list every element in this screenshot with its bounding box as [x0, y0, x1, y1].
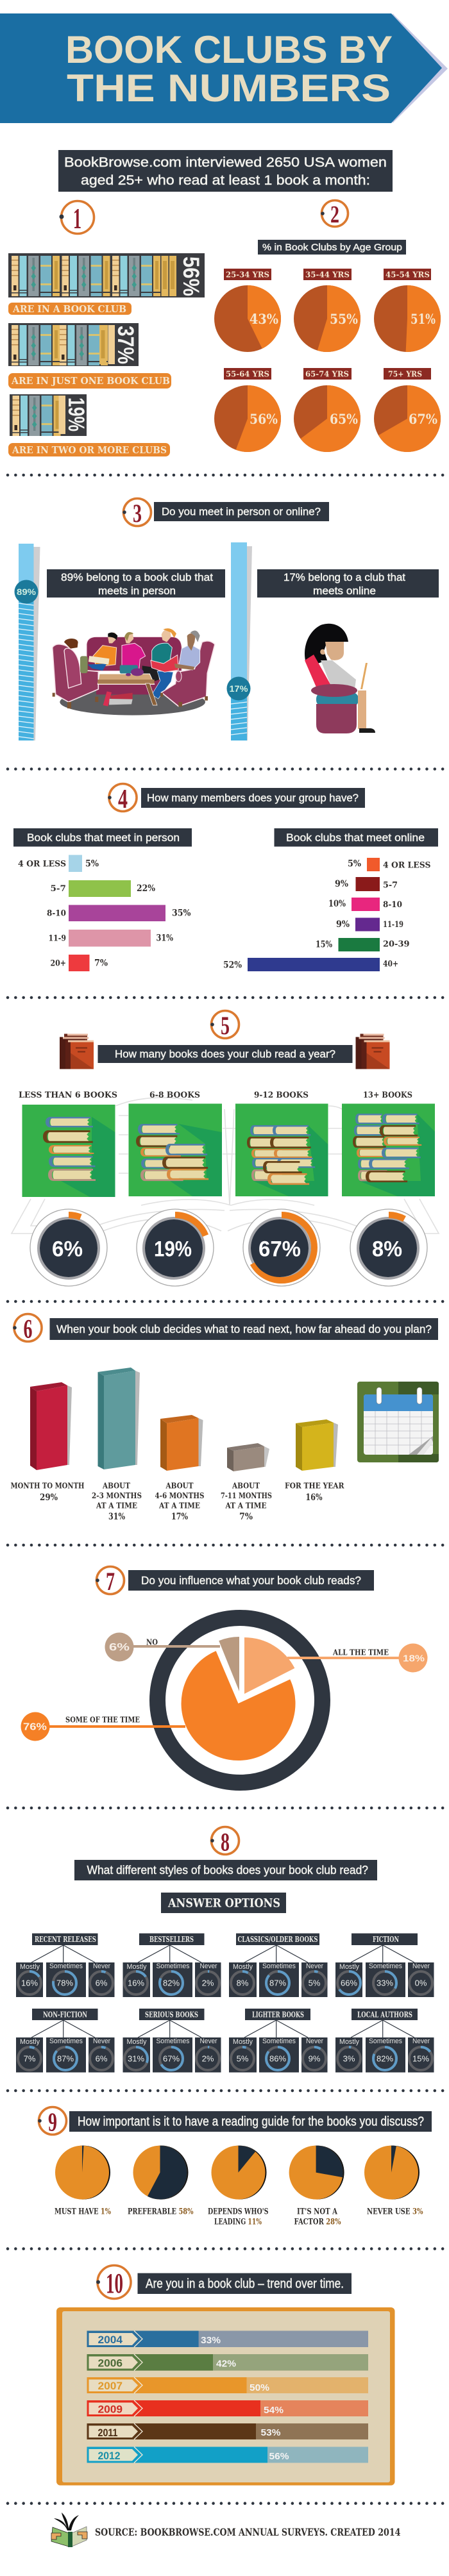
left armchair [53, 644, 98, 708]
bar: for the year [285, 1419, 344, 1503]
intro text box [58, 150, 393, 192]
number badge 9 [38, 2107, 67, 2136]
number badge 2 [321, 200, 348, 228]
footer logo: reader with open book [51, 2513, 87, 2547]
callout: 89 percent in person: meets in person [98, 585, 176, 597]
bar row: 5-7 [335, 877, 398, 891]
bar: 7-11 months: 7% [239, 1512, 253, 1522]
section 10 header [96, 2266, 352, 2299]
gauge: 17 percent online: 17% [230, 684, 248, 694]
section 4 header [108, 783, 365, 814]
callout: 89 percent in person [47, 569, 225, 598]
pie: 65-74 [294, 368, 360, 452]
intro text box: aged 25+ who read at least 1 book a month: [81, 173, 370, 188]
bar row: 11-19 [336, 918, 403, 931]
bar: 2004: 2004 [97, 2334, 123, 2346]
group: lighter books [229, 2009, 327, 2072]
heading: meet in person [13, 828, 192, 846]
bar row: 40+: 40+ [383, 959, 398, 969]
number badge 4 [108, 783, 137, 814]
bar: month to month: 29% [40, 1493, 58, 1503]
number badge 6: 6 [23, 1315, 32, 1344]
group: lighter books: Sometimes [262, 2037, 296, 2045]
bar: 19 percent: 19% [64, 397, 89, 431]
group: fiction [335, 1934, 434, 1997]
bar row: 8-10: 8-10 [383, 900, 402, 910]
heading: answer options [161, 1893, 286, 1913]
pie: 35-44: 35-44 YRS [305, 271, 350, 280]
question: how far ahead: When your book club decides what to read next, how far ahead do you plan? [56, 1323, 432, 1335]
number badge 9: 9 [48, 2107, 57, 2136]
bar row: 20+: 20+ [50, 959, 66, 968]
group: bestsellers: Sometimes [157, 1962, 190, 1970]
donut: 6 percent: 6% [52, 1237, 83, 1262]
number badge 8: 8 [221, 1827, 230, 1857]
group: classics: CLASSICS/OLDER BOOKS [237, 1935, 318, 1944]
bar: 4-6 months: ABOUT [165, 1481, 194, 1490]
leader: some of the time [21, 1651, 296, 1761]
callout: 17 percent online: meets online [313, 585, 376, 597]
group: lighter books: Never [306, 2037, 323, 2045]
group: fiction: 66% [341, 1978, 357, 1987]
group: local authors: LOCAL AUTHORS [357, 2011, 412, 2020]
bar: 2011 [87, 2423, 368, 2439]
bar: 56 percent: 56% [178, 256, 203, 296]
group: non-fiction: NON-FICTION [43, 2011, 87, 2020]
section 3 header [123, 499, 329, 528]
leader: all the time [244, 1637, 427, 1694]
bar row: 5-7: 5-7 [50, 884, 66, 894]
group: bestsellers: 82% [163, 1978, 180, 1987]
bar: 56 percent [8, 253, 205, 297]
bar: month to month: MONTH TO MONTH [10, 1481, 85, 1490]
panel: 13+ books [342, 1091, 435, 1286]
illustration: woman with laptop [305, 624, 375, 733]
title text: THE NUMBERS [67, 67, 391, 110]
group: classics: 87% [269, 1978, 286, 1987]
coffee table [97, 668, 157, 705]
pie: 25-34: 43% [250, 311, 278, 327]
bar: 2006: 2006 [97, 2357, 123, 2370]
bar: 2007: 2007 [97, 2380, 123, 2392]
donut: 6 percent [30, 1209, 107, 1286]
person: left reader [64, 639, 88, 673]
bar: 4-6 months: 4-6 MONTHS [155, 1491, 204, 1500]
icon: calendar [357, 1382, 439, 1462]
group: non-fiction: 7% [24, 2054, 36, 2063]
number badge 3: 3 [133, 499, 142, 528]
section 9 header [38, 2107, 432, 2136]
bar: 2004: 33% [201, 2335, 221, 2346]
title banner [0, 13, 448, 123]
group: serious books: Never [200, 2037, 217, 2045]
heading: meet online: Book clubs that meet online [286, 832, 425, 844]
question: books per year: How many books does your club read a year? [115, 1048, 335, 1060]
intro text box: BookBrowse.com interviewed 2650 USA women [64, 155, 387, 170]
bar row: 20+: 7% [94, 958, 108, 968]
bar row: 5-7: 5-7 [383, 881, 398, 890]
group: fiction: Sometimes [369, 1962, 402, 1970]
pie: 65-74: 65-74 YRS [305, 369, 349, 378]
panel: 9-12 books: 9-12 BOOKS [254, 1091, 309, 1100]
bar: 7-11 months [221, 1443, 272, 1522]
leader: some of the time: SOME OF THE TIME [65, 1714, 140, 1725]
person: magenta sweater [120, 632, 146, 674]
bar row: 5-7: 22% [137, 883, 155, 894]
bar row: 20-39 [316, 938, 409, 951]
number badge 1: 1 [73, 202, 81, 235]
chart: planning horizon book bars [10, 1367, 344, 1522]
group: non-fiction: Never [93, 2037, 110, 2045]
group: local authors: Sometimes [369, 2037, 402, 2045]
bar: 2007: 50% [250, 2382, 269, 2393]
panel: 9-12 books [235, 1091, 328, 1286]
pie: 55-64 [214, 368, 281, 452]
group: recent releases: 6% [96, 1978, 108, 1987]
callout: 89 percent in person: 89% belong to a book club that [61, 572, 213, 583]
bar row: 11-9: 11-9 [49, 933, 66, 944]
group: serious books: Mostly [127, 2038, 147, 2046]
group: recent releases: Sometimes [49, 1962, 83, 1970]
group: non-fiction: Sometimes [49, 2037, 83, 2045]
question: members: How many members does your group have? [147, 792, 359, 804]
pie: 35-44: 55% [330, 311, 358, 327]
donut: 8 percent: 8% [372, 1237, 402, 1262]
group: classics: Sometimes [262, 1962, 296, 1970]
icon: books right [355, 1033, 390, 1069]
pie: not a factor: FACTOR 28% [294, 2217, 341, 2227]
gauge: 17 percent online [227, 542, 252, 740]
group: lighter books: 86% [269, 2054, 286, 2063]
group: lighter books: Mostly [233, 2038, 253, 2046]
stack of books on floor [103, 691, 133, 707]
pie: depends who's leading: LEADING 11% [214, 2217, 262, 2227]
panel: 6-8 books: 6-8 BOOKS [149, 1091, 200, 1100]
pie: preferable [128, 2146, 194, 2217]
bar row: 11-19: 11-19 [383, 920, 403, 930]
group: fiction: Never [412, 1962, 430, 1970]
pie: depends who's leading [208, 2146, 268, 2227]
bar row: 11-9: 31% [157, 933, 173, 944]
bar row: 11-9 [49, 930, 173, 946]
bar row: 40+: 52% [223, 960, 242, 971]
group: local authors [335, 2009, 434, 2072]
callout: 17 percent online: 17% belong to a club that [284, 572, 405, 583]
group: non-fiction: 6% [96, 2054, 108, 2063]
bar: 7-11 months: 7-11 MONTHS [221, 1491, 272, 1500]
gauge: 89 percent in person [14, 544, 40, 740]
number badge 4: 4 [118, 785, 128, 814]
pie: preferable: PREFERABLE 58% [128, 2207, 194, 2217]
bar row: 8-10 [47, 905, 191, 921]
pie: 45-54 [374, 269, 441, 352]
group: fiction: Mostly [339, 1963, 359, 1971]
group: bestsellers: Never [200, 1962, 217, 1970]
question: influence [128, 1570, 374, 1591]
number badge 2: 2 [330, 201, 339, 228]
group: serious books [123, 2009, 221, 2072]
question: styles of books [74, 1860, 377, 1880]
group: local authors: Mostly [339, 2038, 359, 2046]
group: lighter books: LIGHTER BOOKS [252, 2011, 304, 2020]
number badge 1 [59, 201, 94, 235]
bar row: 8-10: 10% [328, 899, 346, 909]
donut: 19 percent: 19% [154, 1237, 192, 1262]
number badge 3 [123, 499, 151, 528]
bar: 4-6 months [155, 1415, 204, 1522]
section 6 header [13, 1314, 438, 1344]
bar: for the year: FOR THE YEAR [285, 1481, 344, 1490]
bar row: 4 or less [18, 855, 99, 872]
number badge 7: 7 [106, 1567, 115, 1596]
pie: 55-64: 55-64 YRS [226, 369, 269, 378]
question: trend: Are you in a book club – trend over time. [146, 2277, 344, 2291]
heading: age group: % in Book Clubs by Age Group [262, 242, 402, 253]
callout: 17 percent online [257, 569, 439, 598]
number badge 5: 5 [221, 1011, 230, 1040]
illustration: book club on sofa [53, 628, 215, 715]
group: local authors: Never [412, 2037, 430, 2045]
label: are in just one book club: ARE IN JUST ONE BOOK CLUB [11, 375, 170, 387]
group: local authors: 3% [343, 2054, 355, 2063]
heading: meet online [275, 828, 438, 846]
bar: 2009: 2009 [97, 2403, 123, 2416]
title text: BOOK CLUBS BY [65, 28, 393, 71]
group: lighter books: 5% [237, 2054, 249, 2063]
donut: 8 percent [350, 1209, 427, 1286]
donut: 67 percent [243, 1209, 320, 1286]
bar: for the year: 16% [305, 1493, 323, 1503]
pie: 45-54: 51% [411, 311, 436, 327]
leader: no: 6% [109, 1641, 130, 1653]
bar row: 40+ [223, 958, 398, 971]
bar: 7-11 months: AT A TIME [225, 1500, 267, 1510]
question: members [141, 788, 365, 808]
panel: 6-8 books [128, 1091, 222, 1286]
section 7 header [96, 1567, 374, 1596]
question: influence: Do you influence what your book club reads? [141, 1574, 361, 1587]
background: open book outline [12, 1098, 439, 1234]
bar row: 20-39: 20-39 [383, 940, 409, 949]
panel: less than 6 books: LESS THAN 6 BOOKS [19, 1091, 117, 1100]
pie: not a factor: IT'S NOT A [297, 2207, 338, 2217]
chart: influence pie [21, 1618, 427, 1782]
leader: no [105, 1632, 239, 1691]
bar row: 4 or less: 4 OR LESS [383, 860, 431, 871]
number badge 6 [13, 1314, 42, 1344]
leader: all the time: ALL THE TIME [332, 1648, 389, 1657]
label: are in two or more clubs: ARE IN TWO OR MORE CLUBS [12, 444, 167, 456]
number badge 7 [96, 1567, 124, 1596]
section 5 header [60, 1010, 390, 1069]
gauge: 89 percent in person: 89% [17, 587, 36, 597]
group: bestsellers: Mostly [127, 1963, 147, 1971]
bar row: 8-10: 8-10 [47, 909, 66, 918]
pie: 45-54: 45-54 YRS [385, 271, 430, 280]
number badge 5 [210, 1010, 239, 1040]
group: local authors: 15% [412, 2054, 429, 2063]
question: styles of books: What different styles of books does your book club read? [87, 1864, 368, 1877]
panel: 13+ books: 13+ BOOKS [363, 1091, 412, 1100]
pie: 35-44 [294, 269, 360, 352]
bar row: 5-7: 9% [335, 879, 348, 889]
bar: 2012: 2012 [97, 2450, 121, 2462]
leader: all the time: 18% [403, 1653, 425, 1664]
pie: 25-34 [214, 269, 281, 352]
bar: 2-3 months: ABOUT [102, 1481, 131, 1490]
number badge 10: 10 [106, 2268, 123, 2299]
bar row: 4 or less [348, 858, 431, 871]
group: classics: Mostly [233, 1963, 253, 1971]
bar: 2006 [87, 2354, 368, 2371]
bar row: 20-39: 15% [316, 940, 332, 950]
pie: 65-74: 65% [330, 411, 358, 427]
panel: trend over time [56, 2307, 395, 2486]
question: books per year [97, 1045, 353, 1063]
pie: 75+: 67% [409, 411, 437, 427]
person: teal top with book [142, 628, 178, 699]
pie: never use: NEVER USE 3% [367, 2207, 423, 2217]
icon: books left [60, 1033, 94, 1069]
group: bestsellers: 16% [128, 1978, 144, 1987]
bar: 2011: 53% [260, 2427, 281, 2438]
bar: 2006: 42% [216, 2358, 236, 2370]
group: bestsellers [123, 1934, 221, 1997]
pie: depends who's leading: DEPENDS WHO'S [208, 2207, 268, 2217]
group: bestsellers: BESTSELLERS [149, 1935, 194, 1944]
group: recent releases: 78% [56, 1978, 73, 1987]
question: trend [137, 2273, 352, 2294]
person: lavender shirt [174, 630, 200, 670]
group: classics: 8% [237, 1978, 249, 1987]
pie: must have [55, 2146, 111, 2217]
pie: 75+: 75+ YRS [388, 369, 422, 378]
bar: 4-6 months: 17% [171, 1512, 188, 1522]
panel: age group pies [214, 240, 441, 452]
right armchair [160, 641, 215, 707]
group: non-fiction [16, 2009, 114, 2072]
panel: book club membership bars [8, 253, 205, 456]
bar row: 20+ [50, 955, 108, 971]
bar: 2-3 months: 31% [108, 1512, 125, 1522]
group: serious books: SERIOUS BOOKS [145, 2011, 198, 2020]
group: classics [229, 1934, 327, 1997]
group: recent releases: RECENT RELEASES [35, 1935, 96, 1944]
group: fiction: 0% [415, 1978, 427, 1987]
bar: 2012: 56% [269, 2451, 289, 2462]
group: classics: 5% [309, 1978, 321, 1987]
group: serious books: Sometimes [157, 2037, 190, 2045]
group: recent releases: 16% [21, 1978, 38, 1987]
question: in person or online: Do you meet in person or online? [162, 505, 321, 518]
group: fiction: FICTION [373, 1935, 399, 1944]
group: recent releases: Never [93, 1962, 110, 1970]
group: local authors: 82% [377, 2054, 393, 2063]
group: recent releases [16, 1934, 114, 1997]
bar: 37 percent [8, 323, 139, 366]
bar: month to month [10, 1382, 85, 1503]
group: serious books: 31% [128, 2054, 144, 2063]
number badge 8 [210, 1827, 239, 1857]
bar row: 5-7 [50, 880, 155, 897]
bar: 7-11 months: ABOUT [232, 1481, 260, 1490]
group: fiction: 33% [377, 1978, 393, 1987]
group: non-fiction: Mostly [20, 2038, 40, 2046]
group: bestsellers: 2% [202, 1978, 214, 1987]
bar: 2-3 months [92, 1367, 142, 1522]
question: in person or online [154, 502, 329, 521]
group: recent releases: Mostly [20, 1963, 40, 1971]
bar: 37 percent: 37% [113, 326, 138, 364]
chart: in-person club size [13, 828, 192, 971]
bar row: 8-10 [328, 898, 402, 911]
group: serious books: 2% [202, 2054, 214, 2063]
question: reading guide [69, 2111, 432, 2132]
heading: meet in person: Book clubs that meet in person [27, 832, 180, 844]
bar: 4-6 months: AT A TIME [158, 1500, 200, 1510]
group: lighter books: 9% [309, 2054, 321, 2063]
section 8 header [74, 1827, 377, 1913]
leader: some of the time: 76% [23, 1722, 47, 1732]
bar: 19 percent [10, 394, 89, 436]
pie: 25-34: 25-34 YRS [226, 271, 269, 280]
bar row: 4 or less: 5% [348, 859, 361, 869]
person: orange shirt [88, 632, 117, 671]
bar: 2009 [87, 2400, 368, 2416]
group: non-fiction: 87% [57, 2054, 74, 2063]
bar: 2012 [87, 2446, 368, 2463]
pie: 55-64: 56% [250, 411, 278, 427]
bar: 2007 [87, 2377, 368, 2393]
bar: 2-3 months: 2-3 MONTHS [92, 1491, 142, 1500]
bar: 2004 [87, 2331, 368, 2347]
number badge 10 [96, 2266, 131, 2299]
heading: answer options: ANSWER OPTIONS [167, 1896, 280, 1911]
label: are in a book club: ARE IN A BOOK CLUB [12, 303, 126, 315]
pie: must have: MUST HAVE 1% [55, 2207, 111, 2217]
heading: age group [258, 240, 406, 255]
question: how far ahead [50, 1318, 438, 1340]
pie: never use [364, 2146, 423, 2217]
bar: 2-3 months: AT A TIME [96, 1500, 137, 1510]
group: classics: Never [306, 1962, 323, 1970]
leader: no: NO [146, 1637, 158, 1646]
bar: 2011: 2011 [97, 2427, 118, 2439]
donut: 19 percent [137, 1209, 214, 1286]
panel: less than 6 books [19, 1091, 117, 1286]
chart: online club size [223, 828, 438, 971]
pie: not a factor [289, 2146, 344, 2227]
bar: 2009: 54% [264, 2405, 284, 2416]
bar row: 4 or less: 5% [85, 859, 99, 869]
bar row: 8-10: 35% [172, 908, 191, 918]
title text [65, 28, 393, 110]
bar row: 4 or less: 4 OR LESS [18, 859, 66, 869]
bar row: 11-19: 9% [336, 919, 350, 930]
group: serious books: 67% [163, 2054, 180, 2063]
pie: 75+ [374, 368, 441, 452]
donut: 67 percent: 67% [258, 1237, 301, 1262]
